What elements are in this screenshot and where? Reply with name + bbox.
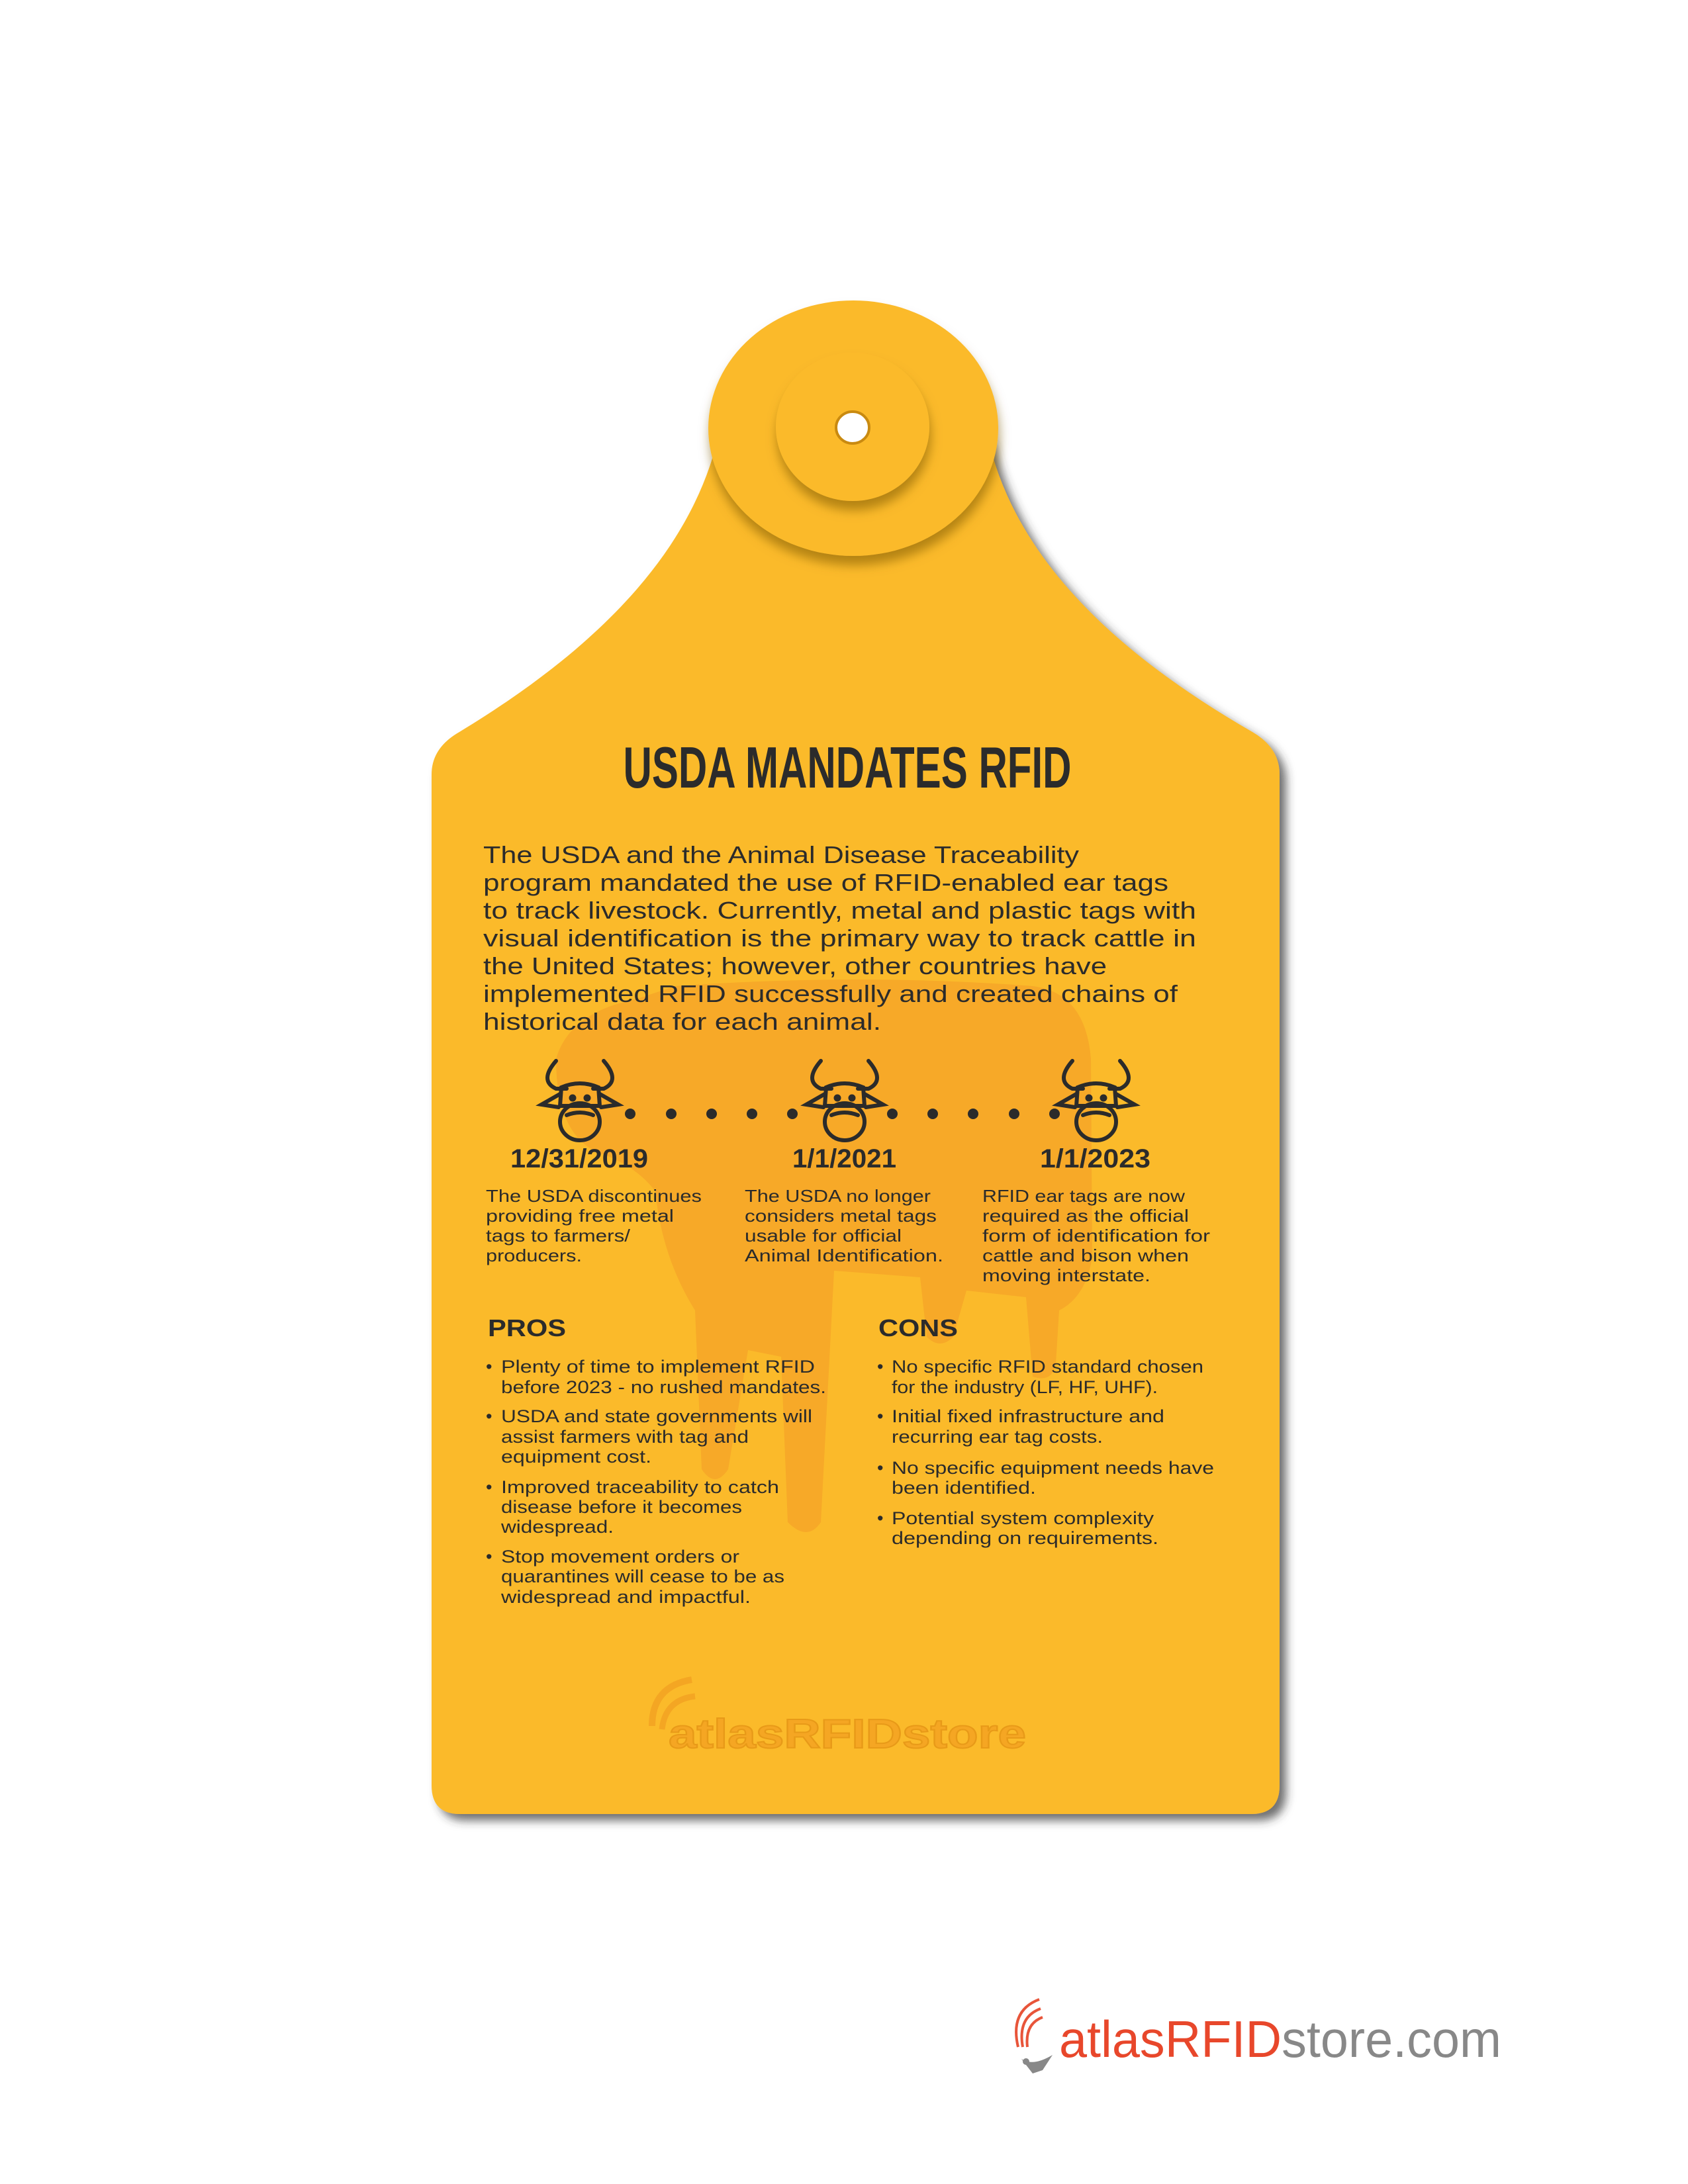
panel: pros: Improved traceability to catch	[501, 1477, 779, 1497]
panel: pros: equipment cost.	[501, 1447, 651, 1467]
dates	[510, 1144, 1150, 1173]
intro paragraph: visual identification is the primary way to track cattle in	[483, 925, 1196, 952]
timeline descriptions: Animal Identification.	[745, 1246, 943, 1265]
intro paragraph: the United States; however, other countries have	[483, 952, 1107, 979]
panel: pros: before 2023 - no rushed mandates.	[501, 1377, 826, 1397]
timeline descriptions: The USDA no longer	[745, 1186, 931, 1206]
panel: pros: •	[486, 1357, 492, 1377]
panel: cons: No specific RFID standard chosen	[892, 1357, 1203, 1377]
dates: 12/31/2019	[510, 1144, 648, 1173]
panel: cons: •	[877, 1357, 883, 1377]
footer logo: atlasRFIDstore.com	[1059, 2010, 1501, 2068]
timeline descriptions: considers metal tags	[745, 1206, 937, 1226]
panel: pros: widespread.	[500, 1517, 614, 1537]
panel: cons: Initial fixed infrastructure and	[892, 1406, 1164, 1426]
panel: cons: depending on requirements.	[892, 1528, 1158, 1548]
panel: cons: No specific equipment needs have	[892, 1458, 1214, 1478]
intro paragraph: implemented RFID successfully and created chains of	[483, 980, 1178, 1007]
intro paragraph: The USDA and the Animal Disease Traceability	[483, 841, 1079, 868]
panel: pros: •	[486, 1477, 492, 1497]
panel: pros: quarantines will cease to be as	[501, 1567, 784, 1586]
watermark logo on tag	[652, 1680, 1026, 1757]
panel: cons: for the industry (LF, HF, UHF).	[892, 1377, 1158, 1397]
panel: cons: recurring ear tag costs.	[892, 1427, 1103, 1447]
tag hole	[836, 412, 869, 443]
title: USDA MANDATES RFID	[624, 735, 1071, 800]
watermark logo on tag: atlasRFIDstore	[669, 1711, 1026, 1757]
panel: cons: •	[877, 1508, 883, 1528]
dates: 1/1/2021	[792, 1144, 896, 1173]
timeline descriptions: form of identification for	[982, 1226, 1210, 1246]
panel: pros	[486, 1314, 826, 1607]
cons heading: CONS	[878, 1314, 958, 1342]
intro paragraph: to track livestock. Currently, metal and plastic tags with	[483, 897, 1196, 924]
pros heading: PROS	[488, 1314, 566, 1342]
intro paragraph	[483, 841, 1196, 1035]
icon: cow head 3	[1058, 1061, 1135, 1140]
panel: cons	[877, 1314, 1214, 1548]
timeline descriptions: providing free metal	[486, 1206, 674, 1226]
tag top circle	[708, 300, 998, 556]
timeline descriptions: The USDA discontinues	[486, 1186, 702, 1206]
panel: pros: Plenty of time to implement RFID	[501, 1357, 815, 1377]
intro paragraph: historical data for each animal.	[483, 1008, 881, 1035]
panel: pros: USDA and state governments will	[501, 1406, 812, 1426]
timeline dots	[625, 1109, 1060, 1119]
intro paragraph: program mandated the use of RFID-enabled ear tags	[483, 869, 1168, 896]
panel: pros: •	[486, 1547, 492, 1567]
timeline descriptions: RFID ear tags are now	[982, 1186, 1185, 1206]
tag body	[432, 437, 1280, 1814]
timeline descriptions	[486, 1186, 1210, 1285]
icon: cow head 1	[541, 1061, 618, 1140]
timeline descriptions: producers.	[486, 1246, 582, 1265]
icon: cow head 2	[806, 1061, 883, 1140]
panel: pros: •	[486, 1406, 492, 1426]
timeline descriptions: required as the official	[982, 1206, 1189, 1226]
panel: cons: •	[877, 1406, 883, 1426]
panel: pros: disease before it becomes	[501, 1497, 742, 1517]
panel: cons: Potential system complexity	[892, 1508, 1154, 1528]
icon: radio arcs figure	[1016, 1999, 1043, 2047]
panel: cons: been identified.	[892, 1478, 1036, 1498]
timeline descriptions: usable for official	[745, 1226, 902, 1246]
panel: pros: assist farmers with tag and	[501, 1427, 749, 1447]
panel: ear tag	[432, 300, 1280, 1814]
panel: pros: widespread and impactful.	[500, 1587, 751, 1607]
tag inner ring	[776, 353, 929, 501]
panel: cons: •	[877, 1458, 883, 1478]
timeline descriptions: cattle and bison when	[982, 1246, 1189, 1265]
timeline descriptions: moving interstate.	[982, 1265, 1150, 1285]
dates: 1/1/2023	[1040, 1144, 1150, 1173]
timeline	[541, 1061, 1135, 1140]
panel: pros: Stop movement orders or	[501, 1547, 739, 1567]
timeline descriptions: tags to farmers/	[486, 1226, 631, 1246]
cow silhouette background	[556, 979, 1092, 1532]
